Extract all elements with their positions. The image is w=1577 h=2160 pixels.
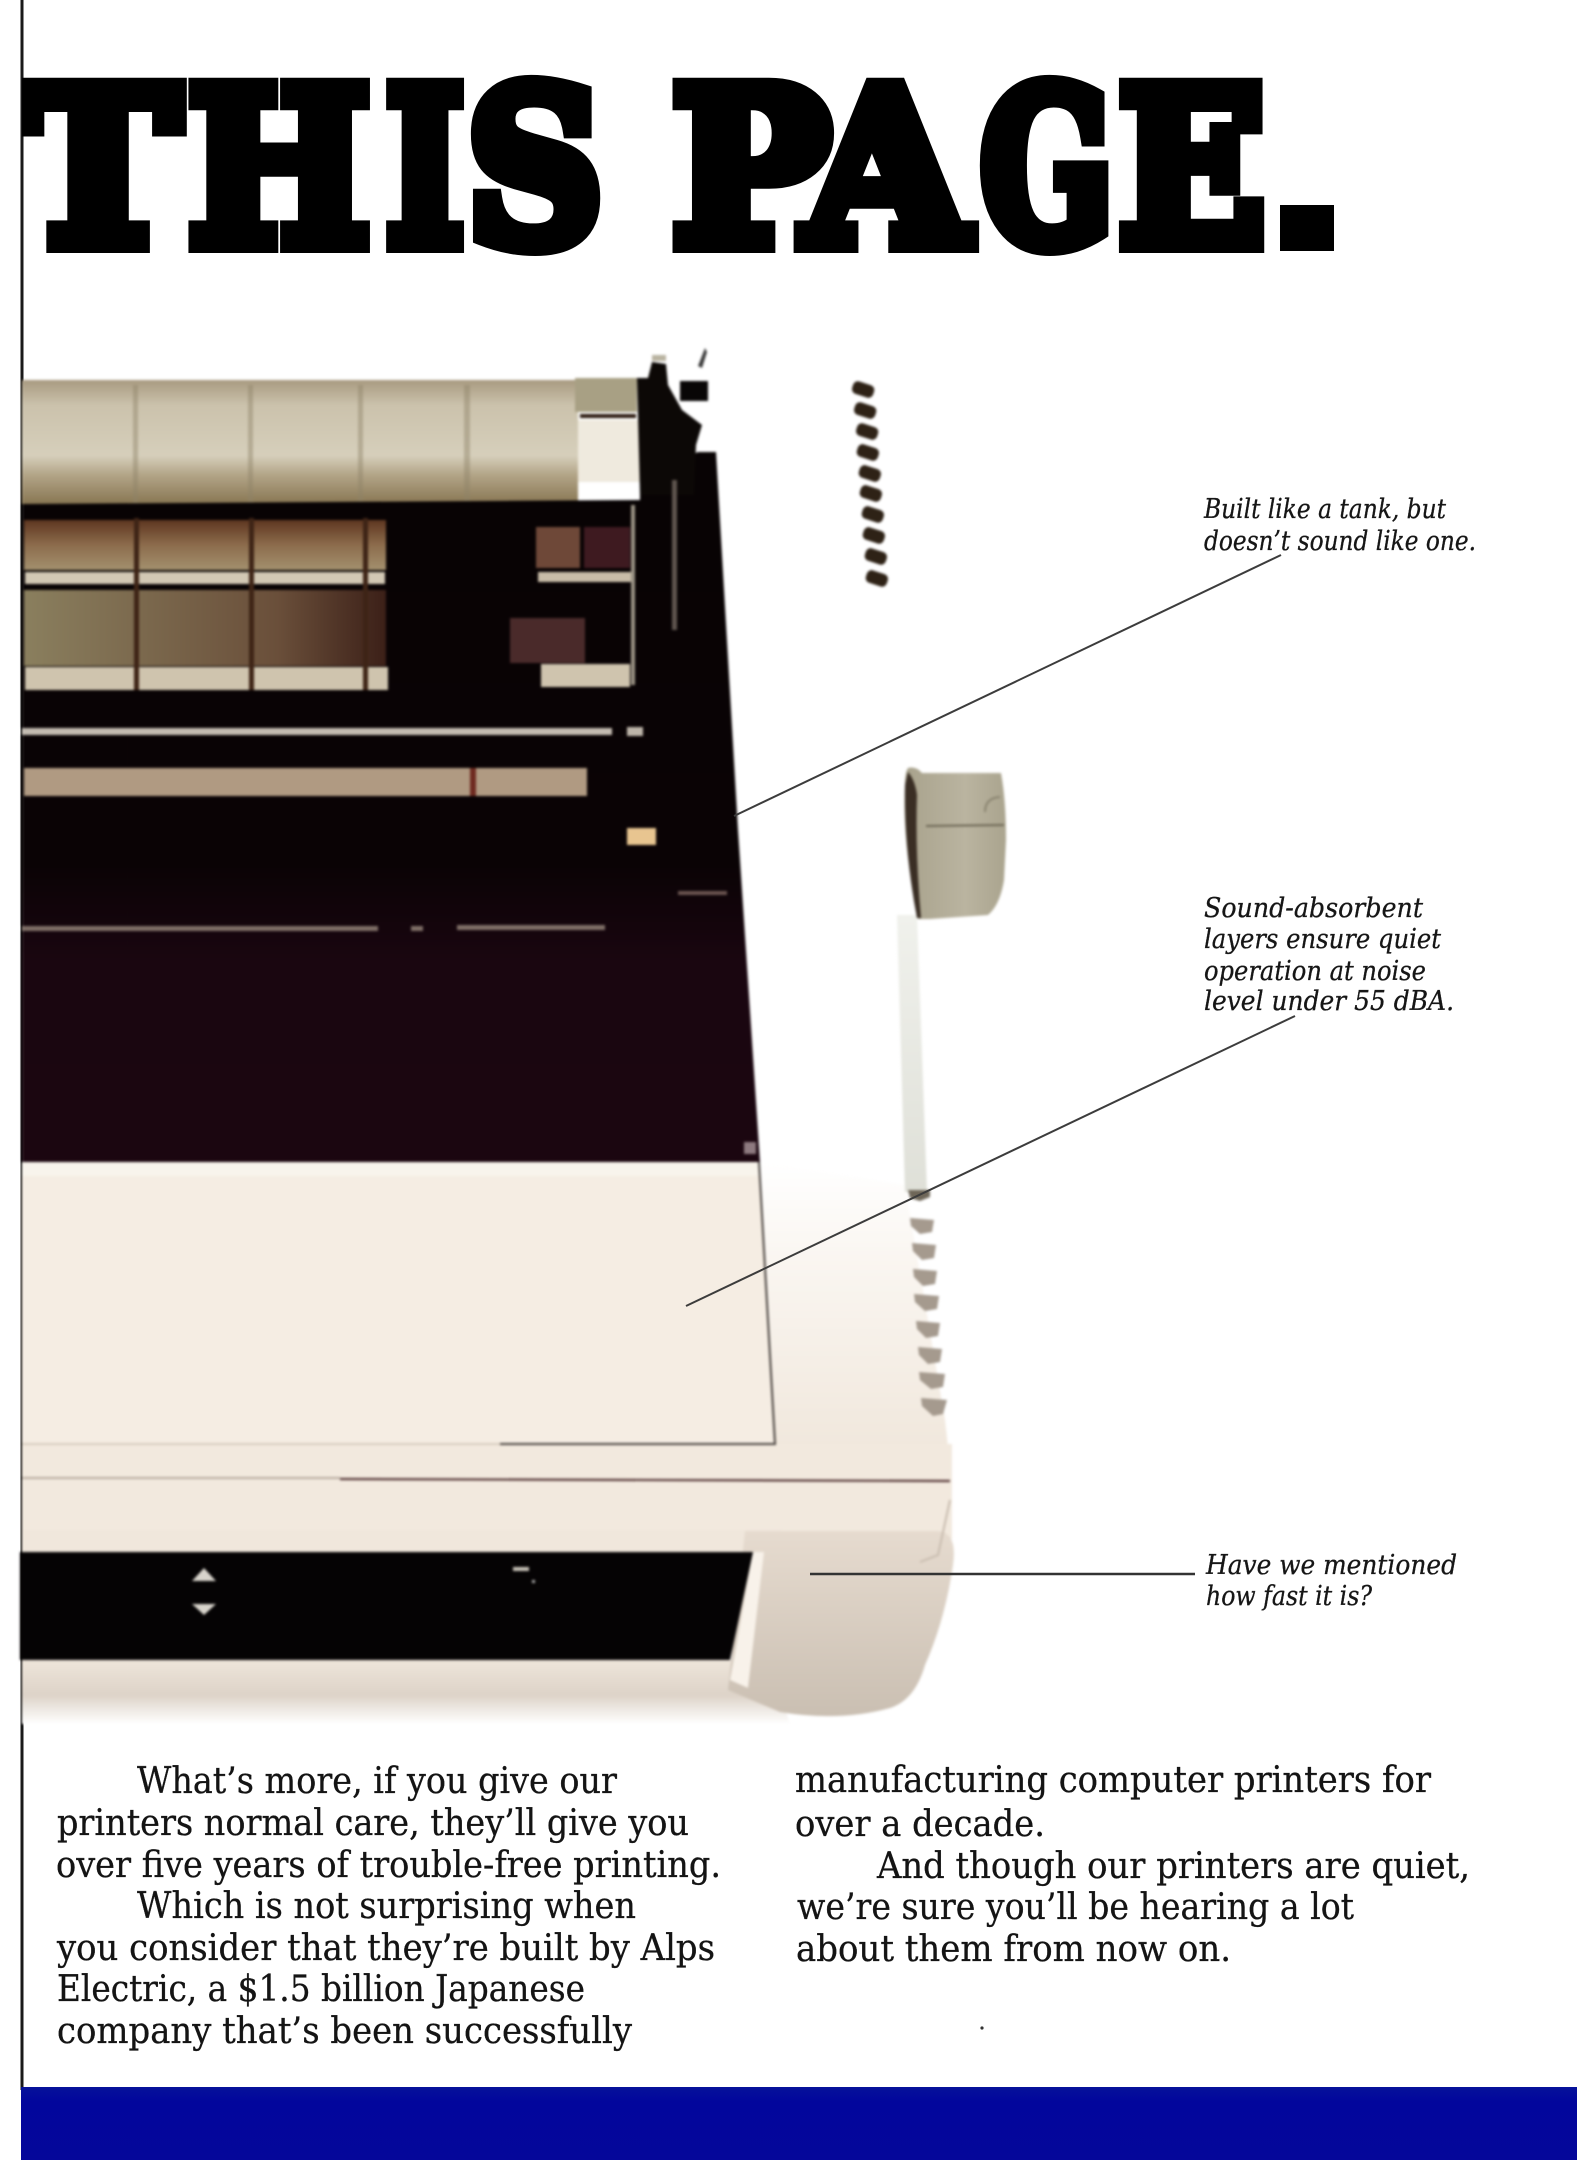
title: I — [386, 45, 464, 294]
callout: built like a tank: doesn’t sound like one. — [1204, 526, 1476, 557]
body copy: left column: over five years of trouble-free printing. — [56, 1845, 721, 1886]
callout: sound-absorbent layers: layers ensure quiet — [1204, 924, 1441, 955]
body copy: left column: you consider that they’re built by Alps — [56, 1928, 715, 1969]
body copy: right column — [795, 1760, 1470, 1970]
leader line: sound-absorbent — [686, 1016, 1295, 1306]
lid outline strokes — [22, 1162, 950, 1562]
lower vent slots — [908, 1190, 947, 1416]
callout: sound-absorbent layers: Sound-absorbent — [1204, 893, 1423, 924]
body copy: right column: over a decade. — [795, 1804, 1045, 1845]
printer dark interior — [22, 452, 760, 1162]
body copy: right column: And though our printers are quiet, — [876, 1846, 1470, 1887]
body copy: left column — [56, 1761, 721, 2052]
callout: how fast: Have we mentioned — [1205, 1550, 1457, 1581]
leader line: tank — [734, 555, 1281, 816]
callout: sound-absorbent layers: operation at noise — [1204, 956, 1426, 987]
title: G — [981, 43, 1113, 293]
title: H — [188, 43, 370, 293]
body copy: right column: manufacturing computer printers for — [795, 1760, 1432, 1801]
title: T — [17, 43, 179, 293]
page edge rule — [20, 0, 24, 2090]
callout: sound-absorbent layers: level under 55 dBA. — [1204, 986, 1454, 1017]
callout: how fast: how fast it is? — [1206, 1581, 1372, 1612]
upper vent slots — [851, 380, 889, 588]
printer illustration — [20, 348, 1006, 1724]
title: S — [467, 44, 603, 294]
body copy: right column: about them from now on. — [796, 1929, 1231, 1970]
callout: built like a tank: Built like a tank, but — [1203, 494, 1446, 525]
title: . — [1285, 130, 1327, 271]
title: A — [803, 43, 969, 294]
body copy: left column: Electric, a $1.5 billion Japanese — [57, 1969, 585, 2010]
printer lower body: lid panel and side — [22, 1160, 954, 1724]
body copy: left column: company that’s been successfully — [57, 2011, 633, 2052]
blue footer band — [21, 2087, 1577, 2160]
body copy: left column: printers normal care, they’ll give you — [57, 1803, 689, 1844]
body copy: left column: Which is not surprising when — [137, 1886, 636, 1927]
callout: how fast — [1205, 1550, 1457, 1612]
paper guide cells and bars — [24, 480, 677, 690]
callout: sound-absorbent layers — [1204, 893, 1454, 1017]
title — [22, 74, 1334, 256]
paper tray — [22, 380, 578, 506]
side tape strip — [897, 915, 927, 1192]
display panel — [20, 1552, 753, 1660]
knob — [905, 768, 1006, 919]
interior rails and strips — [22, 727, 756, 1154]
title: E — [1119, 43, 1265, 293]
title: P — [673, 43, 829, 294]
body copy: right column: we’re sure you’ll be hearing a lot — [797, 1887, 1354, 1928]
leader line: speed — [810, 1573, 1195, 1575]
callout: built like a tank — [1203, 494, 1476, 557]
body copy: left column: What’s more, if you give our — [137, 1761, 618, 1802]
roller and print head assembly — [575, 348, 708, 495]
